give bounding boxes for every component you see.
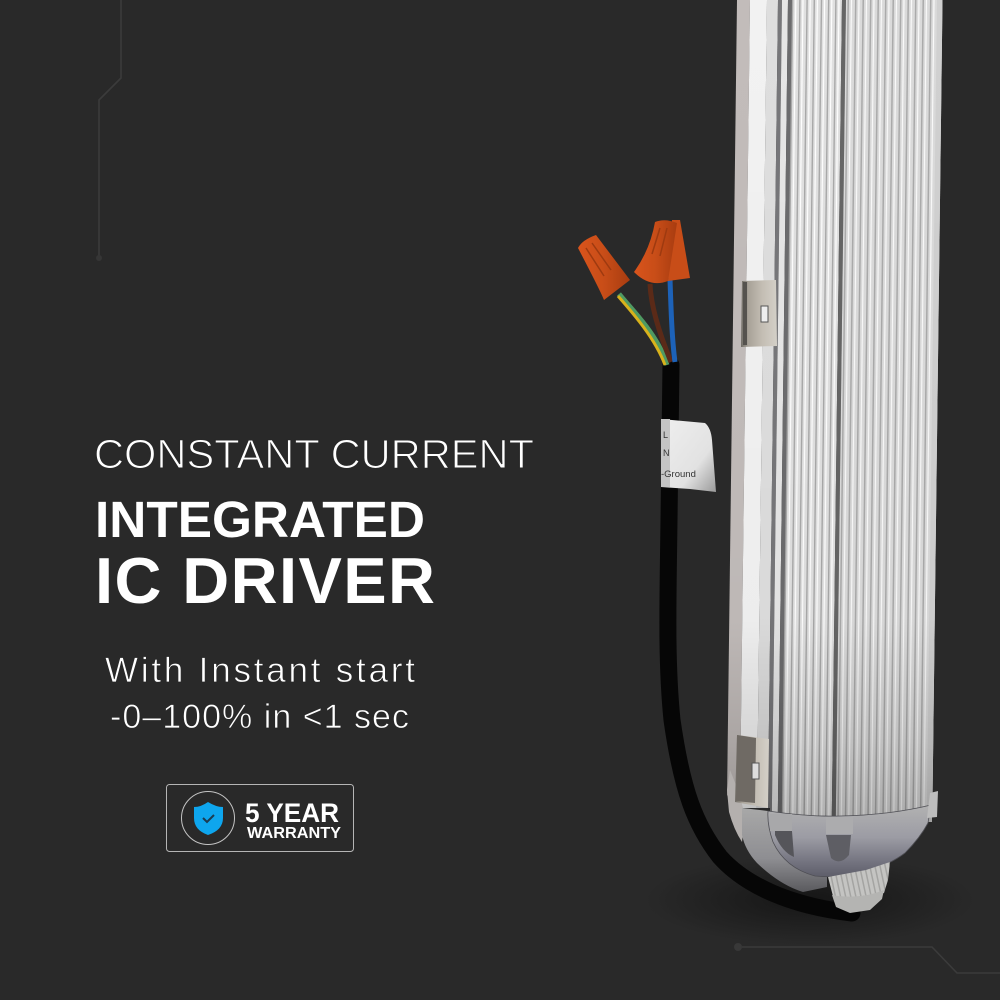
lower metal clip bbox=[735, 735, 769, 808]
lamp housing bbox=[727, 0, 942, 913]
black cable bbox=[668, 365, 852, 913]
heading: IC driver: IC DRIVER bbox=[95, 544, 435, 617]
warranty badge bbox=[166, 784, 354, 852]
blue wire bbox=[670, 279, 675, 362]
decorative circuit line: bottom right bbox=[734, 943, 1000, 973]
wire label: -Ground bbox=[661, 469, 696, 480]
orange wire connector left bbox=[578, 235, 630, 300]
translucent shell on left edge bbox=[727, 770, 745, 842]
subtext line 2: -0–100% in <1 sec bbox=[110, 698, 409, 736]
decorative circuit line: top left bbox=[96, 0, 121, 261]
subtext line 1: With Instant start bbox=[105, 651, 415, 690]
wire label: N bbox=[663, 448, 670, 458]
warranty text: warranty: WARRANTY bbox=[247, 825, 342, 842]
cable and wiring bbox=[578, 220, 852, 913]
orange wire connector right bbox=[668, 220, 690, 281]
side tab on end cap bbox=[927, 791, 938, 818]
heading: constant current: CONSTANT CURRENT bbox=[94, 431, 534, 477]
end cap ribs bbox=[770, 814, 853, 861]
ground shadow under lamp bbox=[645, 855, 975, 945]
cable gland bbox=[828, 862, 890, 913]
end cap outer band bbox=[742, 808, 827, 892]
heading: integrated: INTEGRATED bbox=[95, 491, 425, 548]
warranty text: 5 year: 5 YEAR bbox=[245, 798, 339, 828]
wire label: L bbox=[663, 430, 668, 440]
wire label bbox=[661, 419, 716, 492]
earth wire bbox=[618, 294, 667, 365]
upper metal clip bbox=[741, 280, 777, 347]
icon: shield in circle bbox=[182, 792, 234, 844]
brown wire bbox=[650, 284, 671, 362]
orange wire connector middle bbox=[634, 220, 677, 283]
ribbed aluminium body bbox=[727, 0, 942, 825]
metal end cap body bbox=[768, 805, 931, 877]
